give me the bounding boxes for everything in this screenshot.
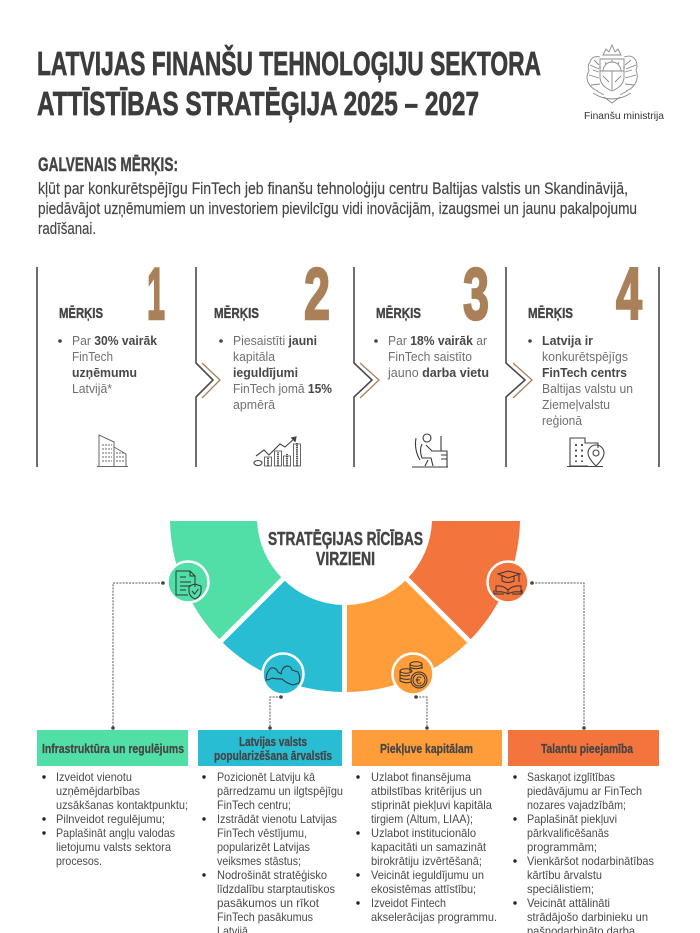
panel: talent availability: Talantu pieejamība: [541, 741, 634, 756]
panel: access to capital: akselerācijas programmu.: [371, 910, 497, 924]
icon: graduation cap and book: [488, 562, 528, 602]
panel: talent availability: Vienkāršot nodarbinātības: [527, 854, 654, 868]
panel: promoting Latvia abroad: Nodrošināt stratēģisko: [217, 868, 327, 882]
main goal text block: [38, 155, 637, 238]
heading: strategic directions: STRATĒĢIJAS RĪCĪBAS: [268, 529, 423, 549]
icon: euro coins: €: [416, 675, 422, 687]
panel: promoting Latvia abroad: Izstrādāt vienotu Latvijas: [217, 812, 337, 826]
connector: infrastructure: [111, 581, 165, 730]
panel: goal 3: MĒRĶIS: [376, 305, 421, 322]
title: ATTĪSTĪBAS STRATĒĢIJA 2025 – 2027: [37, 85, 479, 122]
icon: person at desk: [412, 434, 448, 467]
panel: goal 3: jauno darba vietu: [387, 365, 489, 380]
panel: goal 3: 3: [463, 254, 489, 335]
panel: access to capital: Veicināt ieguldījumu un: [371, 868, 484, 882]
panel: infrastructure and regulation: procesos.: [56, 854, 102, 868]
panel: goal 4: 4: [616, 254, 642, 335]
segment: infrastructure: [170, 521, 283, 641]
panel: promoting Latvia abroad: FinTech centru;: [217, 798, 291, 812]
panel: talent availability: Veicināt attālināti: [527, 896, 610, 910]
panel: promoting Latvia abroad: Latvijas valsts: [239, 734, 307, 749]
icon: map of Latvia: [262, 654, 304, 694]
panel: goal 2: Piesaistīti jauni: [233, 333, 317, 348]
logo: coat of arms and ministry name: Finanšu ministrija: [584, 110, 664, 122]
chart: strategic directions half ring: [170, 521, 520, 692]
panel: access to capital: birokrātiju izvērtēšanā;: [371, 854, 482, 868]
panel: talent availability: programmām;: [527, 840, 597, 854]
icon: office buildings: [97, 435, 128, 466]
logo: coat of arms and ministry name: [584, 45, 664, 122]
panel: goal 2: FinTech jomā 15%: [233, 381, 333, 396]
panel: goal 2: apmērā: [233, 397, 276, 412]
panel: access to capital: kapacitāti un samazināt: [371, 840, 487, 854]
icon: document with shield: [168, 562, 208, 602]
panel: goal 3: Par 18% vairāk ar: [388, 333, 488, 348]
goal column dividers with chevrons: [37, 267, 659, 467]
panel: goal 1: Par 30% vairāk: [72, 333, 158, 348]
panel: promoting Latvia abroad: popularizēt Latvijas: [217, 840, 310, 854]
panel: infrastructure and regulation: lietojumu valsts sektora: [56, 840, 171, 854]
panel: infrastructure and regulation: Infrastruktūra un regulējums: [42, 741, 184, 756]
icon: growth chart with coins: [254, 437, 300, 466]
panel: talent availability: kārtību ārvalstu: [527, 868, 602, 882]
panel: promoting Latvia abroad: Pozicionēt Latviju kā: [217, 770, 315, 784]
panel: access to capital: Piekļuve kapitālam: [380, 741, 473, 756]
panel: goal 3: FinTech saistīto: [388, 349, 472, 364]
panel: talent availability: piedāvājumu ar FinTech: [527, 784, 642, 798]
panel: access to capital: tirgiem (Altum, LIAA);: [371, 812, 473, 826]
panel: goal 2: 2: [304, 254, 330, 335]
panel: access to capital: [352, 730, 502, 924]
title: [37, 44, 541, 122]
heading: strategic directions: VIRZIENI: [316, 549, 375, 569]
panel: goal 4: Ziemeļvalstu: [542, 397, 610, 412]
panel: goal 1: MĒRĶIS: [59, 305, 103, 322]
panel: promoting Latvia abroad: līdzdalību starptautiskos: [217, 882, 335, 896]
panel: goal 4: reģionā: [542, 413, 583, 428]
panel: goal 1: uzņēmumu: [72, 365, 137, 380]
panel: promoting Latvia abroad: pārredzamu un ilgtspējīgu: [217, 784, 343, 798]
panel: promoting Latvia abroad: veiksmes stāstus;: [217, 854, 301, 868]
panel: talent availability: speciālistiem;: [527, 882, 594, 896]
panel: promoting Latvia abroad: popularizēšana ārvalstīs: [214, 748, 332, 763]
panel: promoting Latvia abroad: FinTech vēstījumu,: [217, 826, 307, 840]
panel: access to capital: Uzlabot institucionālo: [371, 826, 476, 840]
panel: promoting Latvia abroad: pasākumos un rīkot: [217, 896, 320, 910]
panel: goal 1: Latvijā*: [72, 381, 112, 396]
panel: talent availability: [508, 730, 659, 933]
panel: infrastructure and regulation: uzņēmējdarbības: [56, 784, 140, 798]
panel: goal 2: ieguldījumi: [233, 365, 298, 380]
connector: promotion: [268, 695, 283, 730]
icon: euro coins: [392, 654, 434, 694]
panel: talent availability: strādājošo darbinieku un: [527, 910, 648, 924]
panel: goal 4: konkurētspējīgs: [542, 349, 628, 364]
panel: infrastructure and regulation: uzsākšanas kontaktpunktu;: [56, 798, 188, 812]
panel: promoting Latvia abroad: [198, 730, 343, 933]
main goal text block: GALVENAIS MĒRĶIS:: [38, 155, 178, 176]
panel: infrastructure and regulation: Izveidot vienotu: [56, 770, 132, 784]
main goal text block: radīšanai.: [38, 219, 96, 238]
panel: goal 3: [374, 254, 489, 467]
panel: goal 4: Baltijas valstu un: [542, 381, 633, 396]
panel: goal 2: [214, 254, 333, 466]
segment: talent: [407, 521, 520, 641]
text: 1: [147, 254, 165, 335]
panel: access to capital: Izveidot Fintech: [371, 896, 446, 910]
panel: talent availability: Saskaņot izglītības: [527, 770, 615, 784]
panel: talent availability: pārkvalificēšanās: [527, 826, 609, 840]
panel: access to capital: stiprināt piekļuvi kapitāla: [371, 798, 492, 812]
panel: goal 4: [528, 254, 642, 466]
segment: access to capital: [347, 579, 469, 692]
panel: talent availability: Paplašināt piekļuvi: [527, 812, 617, 826]
panel: access to capital: ekosistēmas attīstību;: [371, 882, 476, 896]
panel: infrastructure and regulation: [37, 730, 188, 868]
panel: goal 1: FinTech: [72, 349, 113, 364]
panel: goal 1: [58, 254, 165, 466]
panel: infrastructure and regulation: Paplašināt angļu valodas: [56, 826, 175, 840]
heading: strategic directions: [268, 529, 423, 569]
panel: goal 2: kapitāla: [233, 349, 276, 364]
panel: goal 4: Latvija ir: [542, 333, 593, 348]
panel: goal 2: MĒRĶIS: [214, 305, 259, 322]
segment: promotion abroad: [221, 579, 342, 692]
panel: promoting Latvia abroad: FinTech pasākumus: [217, 910, 313, 924]
icon: building with location pin: [567, 438, 604, 466]
connector: capital: [414, 695, 429, 730]
connector: talent: [530, 581, 586, 730]
panel: access to capital: atbilstības kritērijus un: [371, 784, 482, 798]
panel: talent availability: nozares vajadzībām;: [527, 798, 626, 812]
panel: goal 4: MĒRĶIS: [528, 305, 573, 322]
panel: access to capital: Uzlabot finansējuma: [371, 770, 471, 784]
panel: infrastructure and regulation: Pilnveidot regulējumu;: [56, 812, 165, 826]
panel: goal 4: FinTech centrs: [542, 365, 627, 380]
